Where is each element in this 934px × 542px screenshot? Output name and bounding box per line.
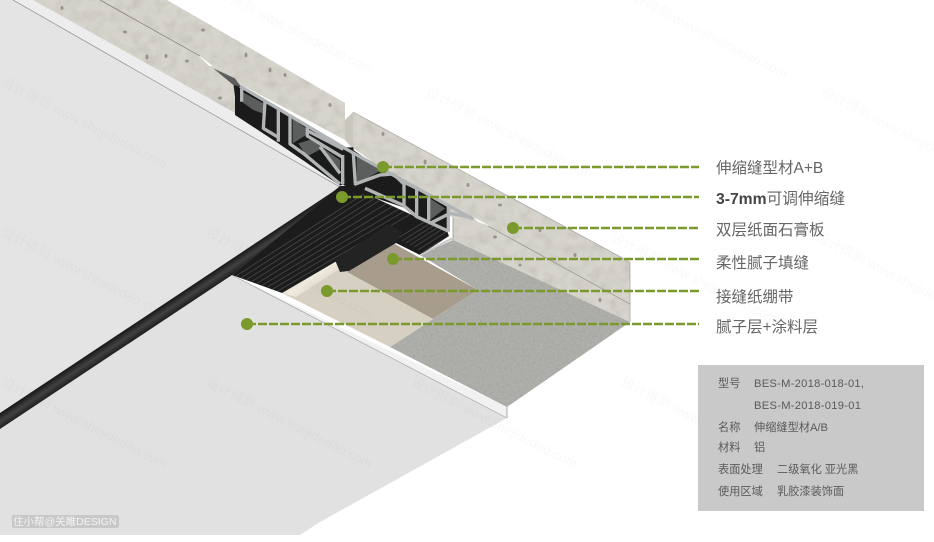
watermark: 设计得到 www.shejidedao.com bbox=[0, 223, 170, 321]
source tag: 住小帮@关雎DESIGN bbox=[13, 515, 116, 528]
info lines bbox=[718, 376, 864, 498]
label: joint tape: 接缝纸绷带 bbox=[716, 288, 794, 306]
watermark: 设计得到 www.shejidedao.com bbox=[409, 373, 580, 471]
leader: gypsum board bbox=[507, 222, 699, 234]
info lines: 乳胶漆装饰面 bbox=[777, 484, 844, 498]
flexible putty filler bbox=[347, 243, 478, 319]
aluminium profile section bbox=[213, 68, 473, 232]
profile dark faces bbox=[213, 68, 445, 220]
watermark: 设计得到 www.shejidedao.com bbox=[0, 73, 170, 171]
label: gypsum board: 双层纸面石膏板 bbox=[716, 221, 825, 239]
info lines: 铝 bbox=[754, 440, 765, 454]
label: profile A+B: 伸缩缝型材A+B bbox=[716, 159, 823, 177]
info lines: 二级氧化 亚光黑 bbox=[777, 462, 858, 476]
panel: product info bbox=[698, 365, 924, 511]
leader: joint tape bbox=[321, 285, 699, 297]
watermark: 设计得到 www.shejidedao.com bbox=[0, 373, 170, 471]
profile A black body bbox=[213, 68, 354, 186]
label: putty and paint layer: 腻子层+涂料层 bbox=[716, 318, 818, 336]
info lines: 型号 bbox=[718, 376, 740, 390]
silver edge trim bbox=[420, 238, 453, 255]
leader: adjustable joint bbox=[336, 191, 699, 203]
info lines: 表面处理 bbox=[718, 462, 763, 476]
drawing: ceiling joint axonometric bbox=[0, 0, 630, 535]
black expansion gap strip bbox=[0, 187, 340, 429]
watermark: 设计得到 www.shejidedao.com bbox=[609, 228, 780, 326]
leader: profile A+B bbox=[377, 161, 699, 173]
info lines: 名称 bbox=[718, 420, 740, 434]
tape rounded edge bbox=[282, 260, 341, 297]
panel: upper ceiling board bbox=[0, 0, 345, 413]
info lines: 伸缩缝型材A/B bbox=[754, 420, 828, 434]
leader: putty and paint layer bbox=[241, 318, 699, 330]
gypsum board: upper right part bbox=[345, 112, 630, 322]
watermark: 设计得到 www.shejidedao.com bbox=[204, 373, 375, 471]
panel: lower ceiling board bbox=[0, 275, 507, 535]
watermark: 设计得到 www.shejidedao.com bbox=[204, 223, 375, 321]
info lines: 使用区域 bbox=[718, 484, 763, 498]
watermark: 设计得到 www.shejidedao.com bbox=[424, 83, 595, 181]
profile B black body bbox=[343, 150, 450, 232]
leader: flexible putty bbox=[387, 253, 699, 265]
info lines: BES-M-2018-018-01, bbox=[754, 378, 864, 390]
concrete soffit bbox=[390, 238, 630, 407]
info lines: 材料 bbox=[718, 440, 740, 454]
label: adjustable joint: 3-7mm可调伸缩缝 bbox=[716, 190, 845, 208]
watermark: 设计得到 www.shejidedao.com bbox=[619, 373, 790, 471]
profile silver webs bbox=[240, 86, 473, 232]
black ridged profile face bbox=[232, 186, 449, 293]
gypsum board: upper left part bbox=[33, 0, 345, 140]
label: flexible putty: 柔性腻子填缝 bbox=[716, 254, 809, 272]
info lines: BES-M-2018-019-01 bbox=[754, 400, 861, 412]
joint tape layer bbox=[282, 260, 433, 347]
